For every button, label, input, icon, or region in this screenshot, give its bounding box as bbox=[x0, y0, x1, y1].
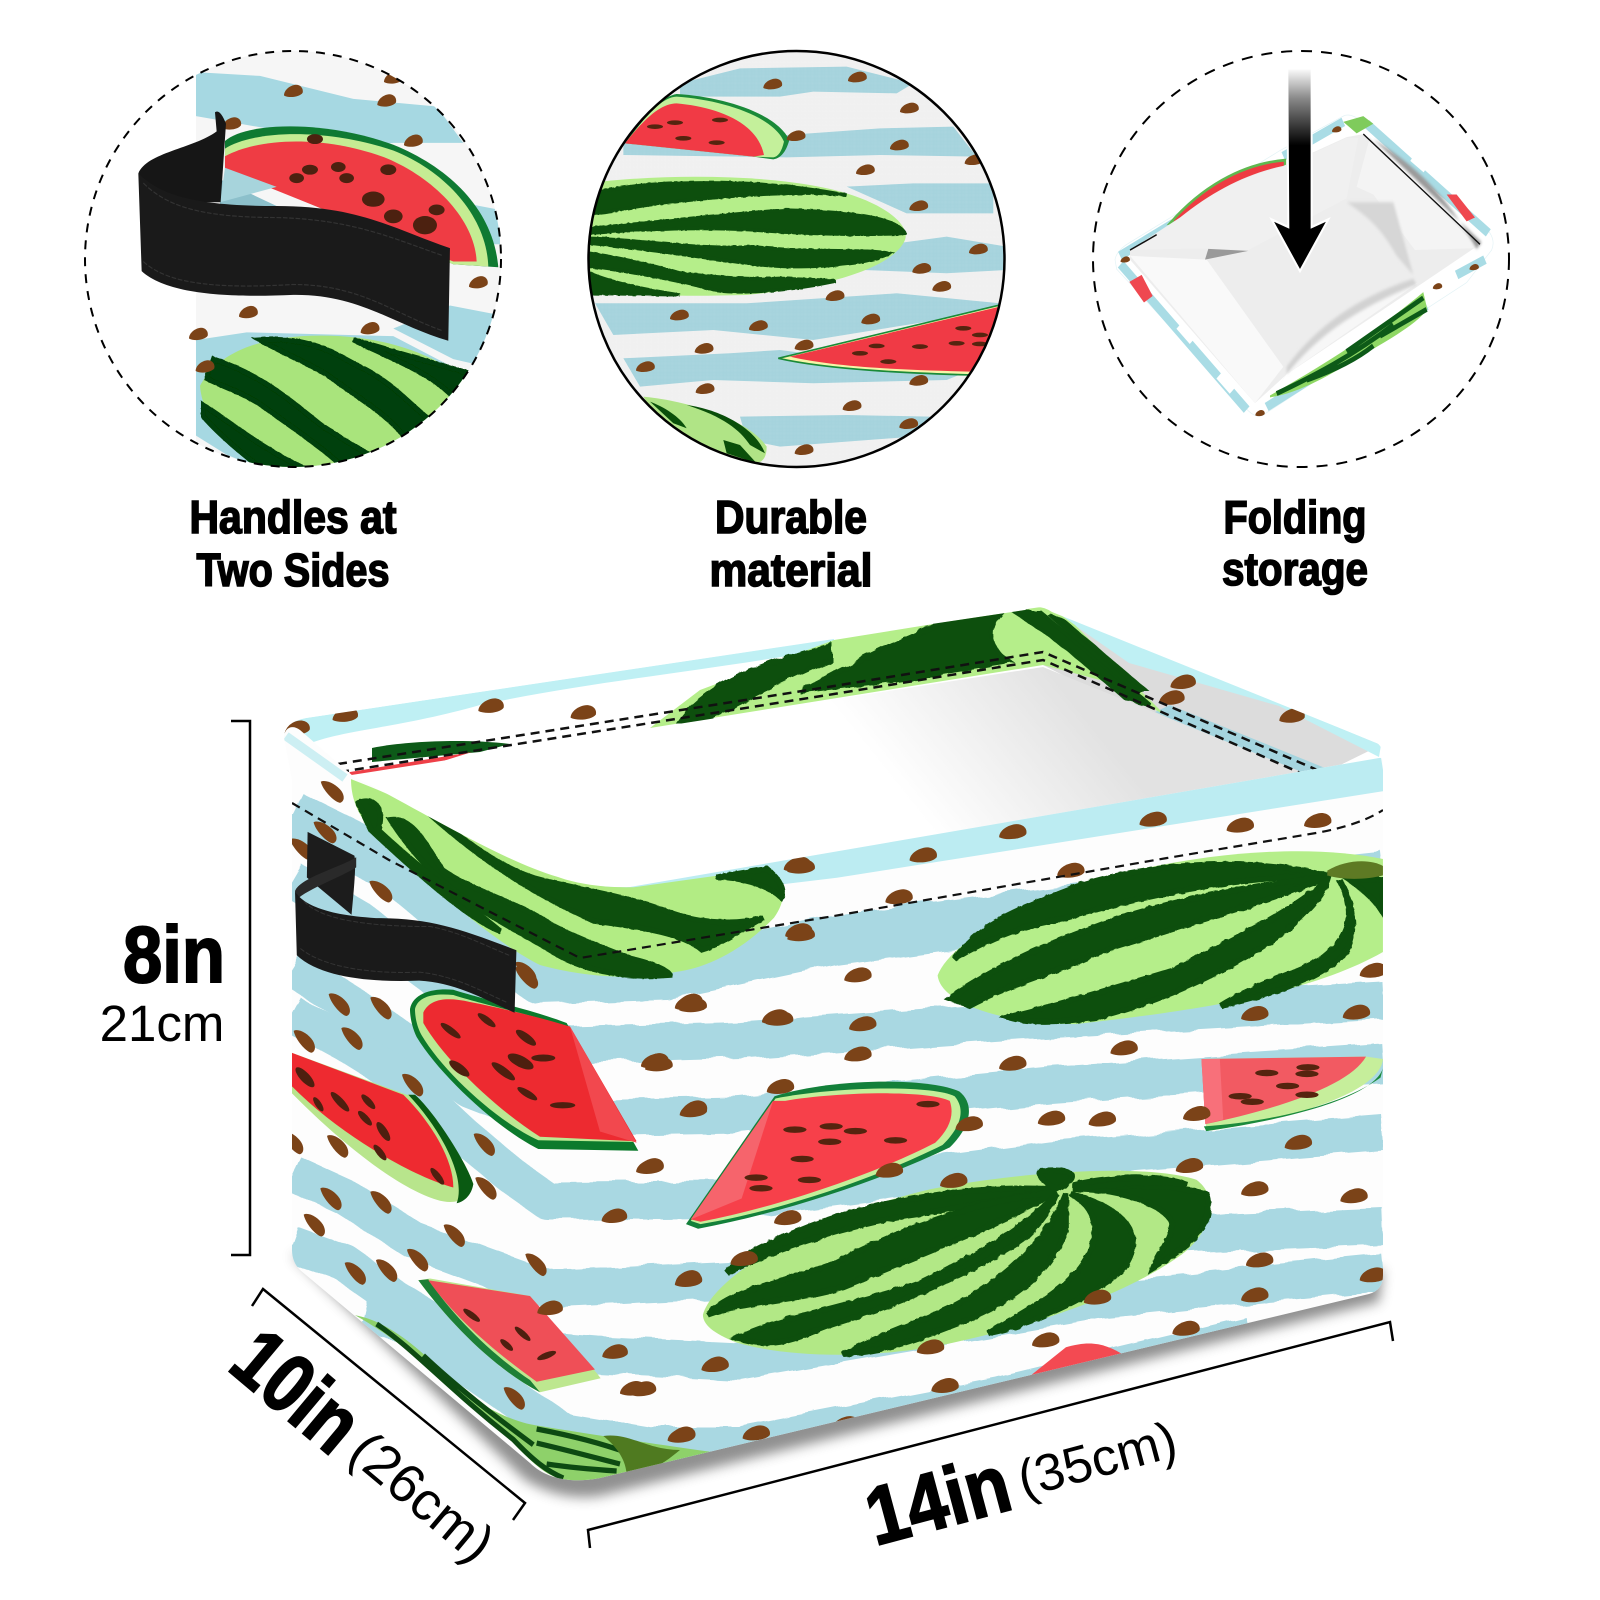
icon: black side handle bbox=[295, 832, 516, 1013]
floor bbox=[352, 667, 1300, 824]
pale rim band bbox=[600, 770, 1383, 885]
fabric edges bbox=[1120, 122, 1488, 410]
slice seeds bbox=[647, 118, 988, 364]
height bracket bbox=[231, 721, 250, 1255]
fabric stripes bbox=[196, 72, 500, 482]
right wall bbox=[1044, 626, 1368, 768]
detail circle: handle close-up bbox=[138, 40, 516, 483]
outer front and side faces bbox=[280, 700, 1390, 1500]
label: durable: Durable bbox=[715, 491, 867, 543]
side face melon wrapping the corner bbox=[351, 779, 783, 977]
arrow: fold down bbox=[1272, 68, 1328, 271]
seeds, side face bbox=[281, 956, 728, 1441]
dimension: height bbox=[100, 721, 250, 1255]
dashed outline bbox=[1093, 51, 1509, 467]
slice seed dashes bbox=[293, 1011, 575, 1362]
front face motifs bbox=[629, 812, 1387, 1443]
panel: folding storage bbox=[1093, 51, 1509, 595]
watermelon slice, centre bbox=[686, 1082, 969, 1229]
back wall slice bbox=[349, 741, 510, 775]
big watermelon, upper right bbox=[938, 851, 1383, 1024]
detail circle: fabric close-up bbox=[590, 52, 1004, 466]
width label centimetres: (35cm) bbox=[1012, 1411, 1183, 1509]
basket interior bbox=[1130, 134, 1480, 403]
interior back walls bbox=[284, 607, 1381, 824]
green melon band bbox=[1270, 292, 1427, 397]
label: folding: Folding bbox=[1224, 491, 1366, 543]
panel: handles at two sides bbox=[85, 40, 516, 596]
watermelon slice bbox=[220, 126, 498, 267]
icon: black fabric handle bbox=[138, 112, 450, 341]
dashed outline bbox=[85, 51, 501, 467]
width bracket bbox=[588, 1322, 1393, 1548]
side face motifs bbox=[281, 956, 728, 1482]
ground shadow bbox=[292, 1255, 1383, 1497]
slice 2 bbox=[292, 1053, 473, 1203]
whole watermelon bbox=[587, 177, 906, 296]
lower watermelon bbox=[643, 397, 767, 463]
fabric stripes bbox=[595, 67, 1007, 447]
fabric seeds bbox=[1120, 126, 1479, 416]
big watermelon, lower centre bbox=[703, 1170, 1210, 1355]
product: watermelon fabric basket bbox=[280, 600, 1390, 1500]
whole watermelon bbox=[200, 336, 469, 467]
dimension: width bbox=[588, 1322, 1393, 1563]
solid outline bbox=[588, 51, 1004, 467]
label: handles: Two Sides bbox=[196, 544, 390, 596]
right slice seeds bbox=[1229, 1064, 1320, 1105]
seeds bbox=[189, 71, 488, 373]
texture bbox=[596, 67, 1003, 446]
bottom edge melon bbox=[355, 1315, 723, 1482]
upper left seeds bbox=[289, 776, 815, 1071]
seeds bbox=[636, 72, 988, 455]
top watermelon slice bbox=[625, 94, 789, 159]
watermelon slice, bottom bbox=[1032, 1344, 1122, 1375]
seeds, front face bbox=[629, 812, 1387, 1443]
height label centimetres: 21cm bbox=[100, 995, 224, 1052]
inside stitching bbox=[338, 652, 1322, 778]
inner wall seeds bbox=[284, 675, 1305, 735]
label: folding: storage bbox=[1222, 543, 1368, 595]
label: handles: Handles at bbox=[190, 491, 396, 543]
folded basket bbox=[1115, 115, 1493, 416]
label: durable: material bbox=[710, 544, 872, 596]
slice seeds bbox=[745, 1101, 940, 1192]
pale rim bbox=[284, 608, 1381, 757]
label: handles bbox=[190, 491, 396, 596]
dimension: depth bbox=[214, 1289, 525, 1574]
back melon bbox=[650, 606, 1165, 728]
front seam stitching bbox=[292, 803, 1383, 958]
panel: durable material bbox=[580, 40, 1020, 596]
slice 3 bbox=[418, 1278, 601, 1392]
label: durable bbox=[710, 491, 872, 596]
depth label inches: 10in bbox=[214, 1310, 380, 1471]
slice seeds bbox=[289, 134, 445, 234]
depth label centimetres: (26cm) bbox=[338, 1420, 506, 1574]
height label inches: 8in bbox=[123, 910, 225, 999]
depth bracket bbox=[252, 1289, 525, 1520]
slice 1 bbox=[410, 989, 638, 1151]
watermelon slice, right bbox=[1201, 1057, 1383, 1131]
wavy blue stripes bbox=[292, 816, 1383, 1445]
label: folding bbox=[1222, 491, 1368, 595]
width label inches: 14in bbox=[856, 1438, 1020, 1563]
lower right watermelon slice bbox=[778, 305, 1000, 375]
